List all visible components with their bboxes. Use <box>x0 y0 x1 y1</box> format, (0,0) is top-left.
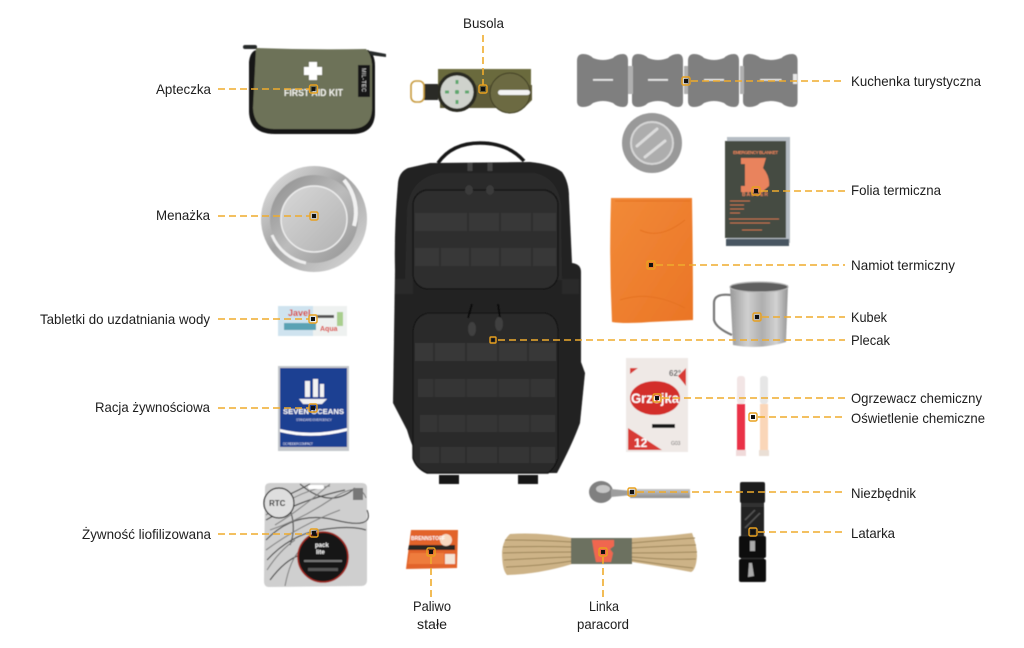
callout lines and markers <box>218 35 845 597</box>
stove <box>577 54 798 107</box>
multitool <box>589 481 690 503</box>
chemical warmer: Grzojka <box>631 390 679 406</box>
label: Kuchenka turystyczna: Kuchenka turystyczna <box>851 73 981 89</box>
label: Namiot termiczny: Namiot termiczny <box>851 257 955 273</box>
freeze-dried food: lite <box>316 550 325 556</box>
food ration: DC RIDDER COMPACT <box>283 442 314 446</box>
label: Paliwo stałe <box>413 598 451 632</box>
solid fuel: BRENNSTOFF <box>411 536 445 542</box>
water tablets: Aqua <box>320 326 338 333</box>
label: Apteczka: Apteczka <box>156 81 211 97</box>
water tablets <box>278 306 347 336</box>
thermal blanket: BADGER <box>742 192 768 198</box>
freeze-dried food: RTC <box>269 499 286 508</box>
chemical warmer <box>626 358 688 452</box>
chemical warmer: 12 <box>634 436 648 450</box>
first aid kit: MIL-TEC <box>360 68 366 92</box>
label: Kubek: Kubek <box>851 309 888 325</box>
label: Paliwo stałe: stałe <box>417 616 447 632</box>
orange tent package <box>610 198 693 323</box>
label: Linka paracord <box>577 598 629 632</box>
compass <box>411 69 532 113</box>
first aid kit <box>243 45 386 134</box>
kit tag <box>358 65 370 97</box>
label: Ogrzewacz chemiczny: Ogrzewacz chemiczny <box>851 390 982 406</box>
solid fuel <box>406 530 458 569</box>
chemical warmer: G03 <box>671 441 681 447</box>
mug <box>714 282 788 347</box>
backpack <box>393 143 585 484</box>
backpack lower pocket <box>413 313 558 473</box>
label: Żywność liofilizowana: Żywność liofilizowana <box>82 525 211 542</box>
thermal blanket <box>725 137 790 246</box>
flashlight <box>739 482 766 582</box>
label: Linka paracord: paracord <box>577 616 629 632</box>
stove disc <box>622 113 682 173</box>
chemical warmer: 62° <box>669 369 681 378</box>
thermal blanket: EMERGENCY BLANKET <box>733 150 778 155</box>
label: Menażka: Menażka <box>156 207 210 223</box>
backpack zippers <box>470 163 490 171</box>
backpack upper pocket <box>413 190 558 289</box>
label: Plecak: Plecak <box>851 332 891 348</box>
cross <box>304 62 322 80</box>
glow sticks <box>736 376 769 456</box>
label: Niezbędnik: Niezbędnik <box>851 485 917 501</box>
backpack side buckles <box>395 279 413 294</box>
paracord <box>502 533 697 575</box>
label: Racja żywnościowa: Racja żywnościowa <box>95 399 210 415</box>
label: Latarka: Latarka <box>851 525 895 541</box>
freeze-dried food: pack <box>315 543 329 549</box>
food ration <box>278 366 349 451</box>
label: Linka paracord: Linka <box>589 598 619 614</box>
label: Paliwo stałe: Paliwo <box>413 598 451 614</box>
label: Folia termiczna: Folia termiczna <box>851 182 941 198</box>
freeze-dried food <box>264 483 368 587</box>
kit text: FIRST AID KIT <box>284 87 343 99</box>
backpack body <box>393 162 585 473</box>
blanket logo <box>741 158 769 192</box>
water tablets: Javel <box>288 308 311 318</box>
food ration: STANDARD EMERGENCY <box>296 418 333 422</box>
label: Tabletki do uzdatniania wody: Tabletki do uzdatniania wody <box>40 311 210 327</box>
food ration: SEVEN OCEANS <box>283 407 344 416</box>
plate <box>261 166 367 272</box>
backpack feet <box>439 475 459 484</box>
label: Oświetlenie chemiczne: Oświetlenie chemiczne <box>851 410 985 426</box>
label: Busola: Busola <box>463 15 504 31</box>
ship <box>299 379 327 404</box>
backpack handle <box>438 143 524 163</box>
